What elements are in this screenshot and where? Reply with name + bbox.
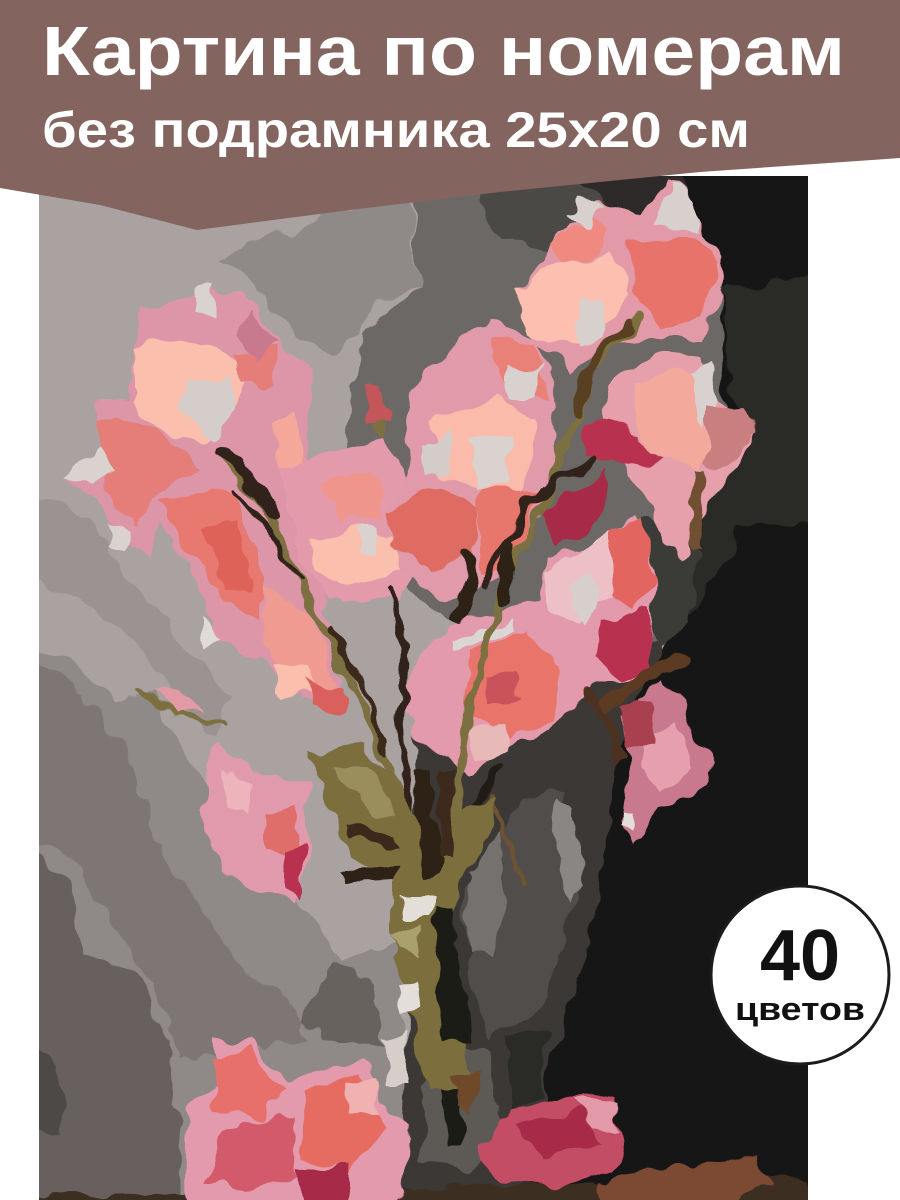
title: Картина по номерам — [42, 12, 845, 90]
flower: bottom left bloom — [185, 1040, 410, 1200]
flower: upper left bloom — [62, 285, 345, 715]
flower: lower left bloom — [205, 745, 310, 905]
subtitle: без подрамника 25х20 см — [42, 102, 750, 158]
bouquet base and vase stems — [310, 745, 495, 1145]
flower: right lower bloom — [620, 680, 715, 845]
flower: bud on left — [156, 687, 205, 713]
badge: 40 colours: 40 — [760, 916, 840, 996]
badge: 40 colours: цветов — [735, 991, 865, 1027]
flower: top right bloom — [515, 180, 725, 375]
flower: bud top centre — [365, 382, 388, 425]
flower: right bloom — [580, 350, 755, 560]
flower: bottom centre fallen petals — [480, 1095, 770, 1200]
banner background — [0, 0, 900, 230]
flower: central bloom — [390, 320, 560, 600]
badge: 40 colours — [711, 886, 889, 1064]
stems and leaves — [140, 320, 680, 885]
flower: lower central bloom — [400, 470, 655, 775]
flower: central left bloom — [280, 440, 430, 600]
